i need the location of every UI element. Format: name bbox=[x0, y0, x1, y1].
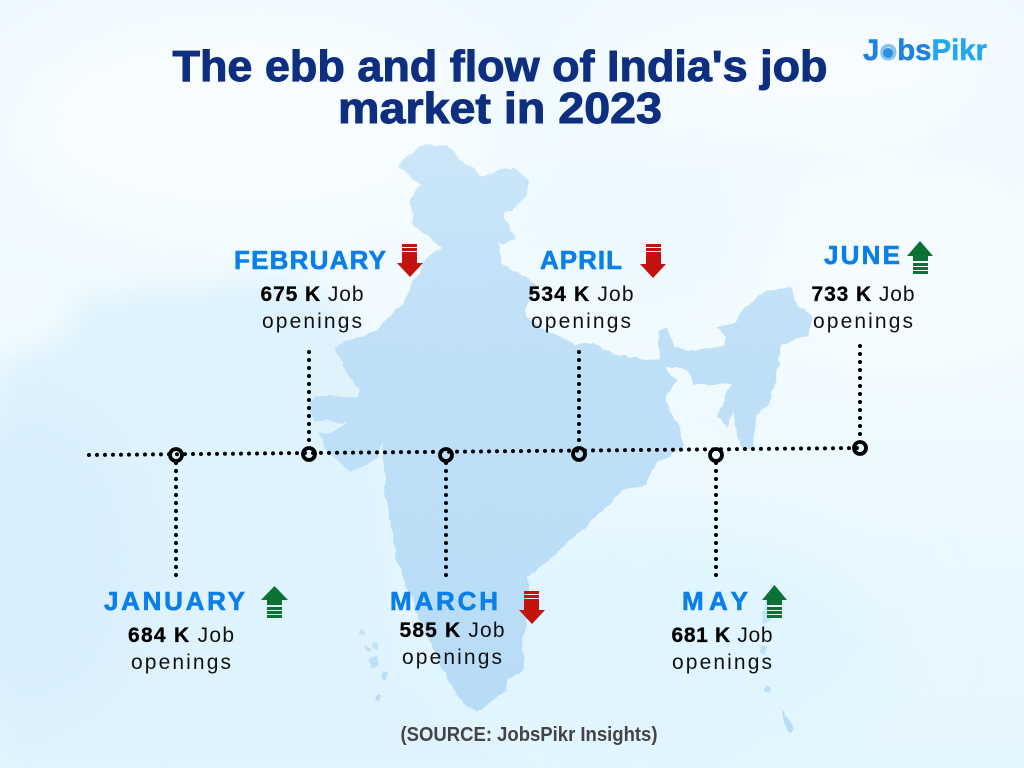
icon: down arrow bbox=[640, 244, 666, 278]
May label: openings bbox=[672, 651, 772, 674]
February label: 675 K Job bbox=[260, 283, 364, 306]
icon: up arrow bbox=[762, 585, 787, 618]
April label: 534 K Job bbox=[528, 283, 634, 306]
May label: 681 K Job bbox=[672, 624, 772, 647]
connector: February bbox=[307, 352, 311, 447]
connector: January bbox=[174, 463, 178, 577]
connector: April bbox=[577, 352, 581, 447]
January label bbox=[104, 586, 288, 674]
marker: April bbox=[573, 448, 585, 460]
marker: May bbox=[710, 449, 722, 461]
islands: Andaman and Nicobar bbox=[758, 583, 794, 734]
marker: February bbox=[303, 448, 315, 460]
June label: 733 K Job bbox=[812, 283, 914, 306]
April label: APRIL bbox=[540, 245, 622, 275]
islands: Lakshadweep bbox=[360, 628, 387, 701]
April label: openings bbox=[531, 310, 631, 333]
June label bbox=[812, 240, 933, 333]
connector: May bbox=[714, 463, 718, 577]
title bbox=[172, 42, 828, 133]
connector: March bbox=[444, 463, 448, 577]
timeline bbox=[89, 448, 860, 461]
March label: openings bbox=[402, 646, 502, 669]
February label: openings bbox=[262, 310, 362, 333]
April label bbox=[528, 244, 666, 333]
title: market in 2023 bbox=[338, 84, 662, 133]
logo: JobsPikr: JobsPikr bbox=[863, 34, 987, 67]
marker: June bbox=[854, 442, 866, 454]
title: The ebb and flow of India's job bbox=[172, 42, 828, 91]
May label bbox=[672, 585, 787, 674]
June label: JUNE bbox=[824, 240, 900, 270]
February label bbox=[234, 244, 423, 333]
January label: openings bbox=[131, 651, 231, 674]
March label: MARCH bbox=[390, 586, 498, 616]
icon: up arrow bbox=[261, 586, 288, 618]
connector: June bbox=[858, 346, 862, 441]
map of India bbox=[307, 145, 813, 734]
January label: 684 K Job bbox=[128, 624, 234, 647]
January label: JANUARY bbox=[104, 586, 245, 616]
May label: MAY bbox=[682, 586, 748, 616]
icon: down arrow bbox=[519, 591, 545, 624]
icon: down arrow bbox=[397, 244, 423, 277]
source note: (SOURCE: JobsPikr Insights) bbox=[400, 724, 658, 746]
February label: FEBRUARY bbox=[234, 245, 386, 275]
March label: 585 K Job bbox=[400, 619, 504, 642]
March label bbox=[390, 586, 545, 669]
icon: up arrow bbox=[907, 241, 933, 274]
June label: openings bbox=[813, 310, 913, 333]
marker: January bbox=[170, 449, 182, 461]
marker: March bbox=[440, 449, 452, 461]
